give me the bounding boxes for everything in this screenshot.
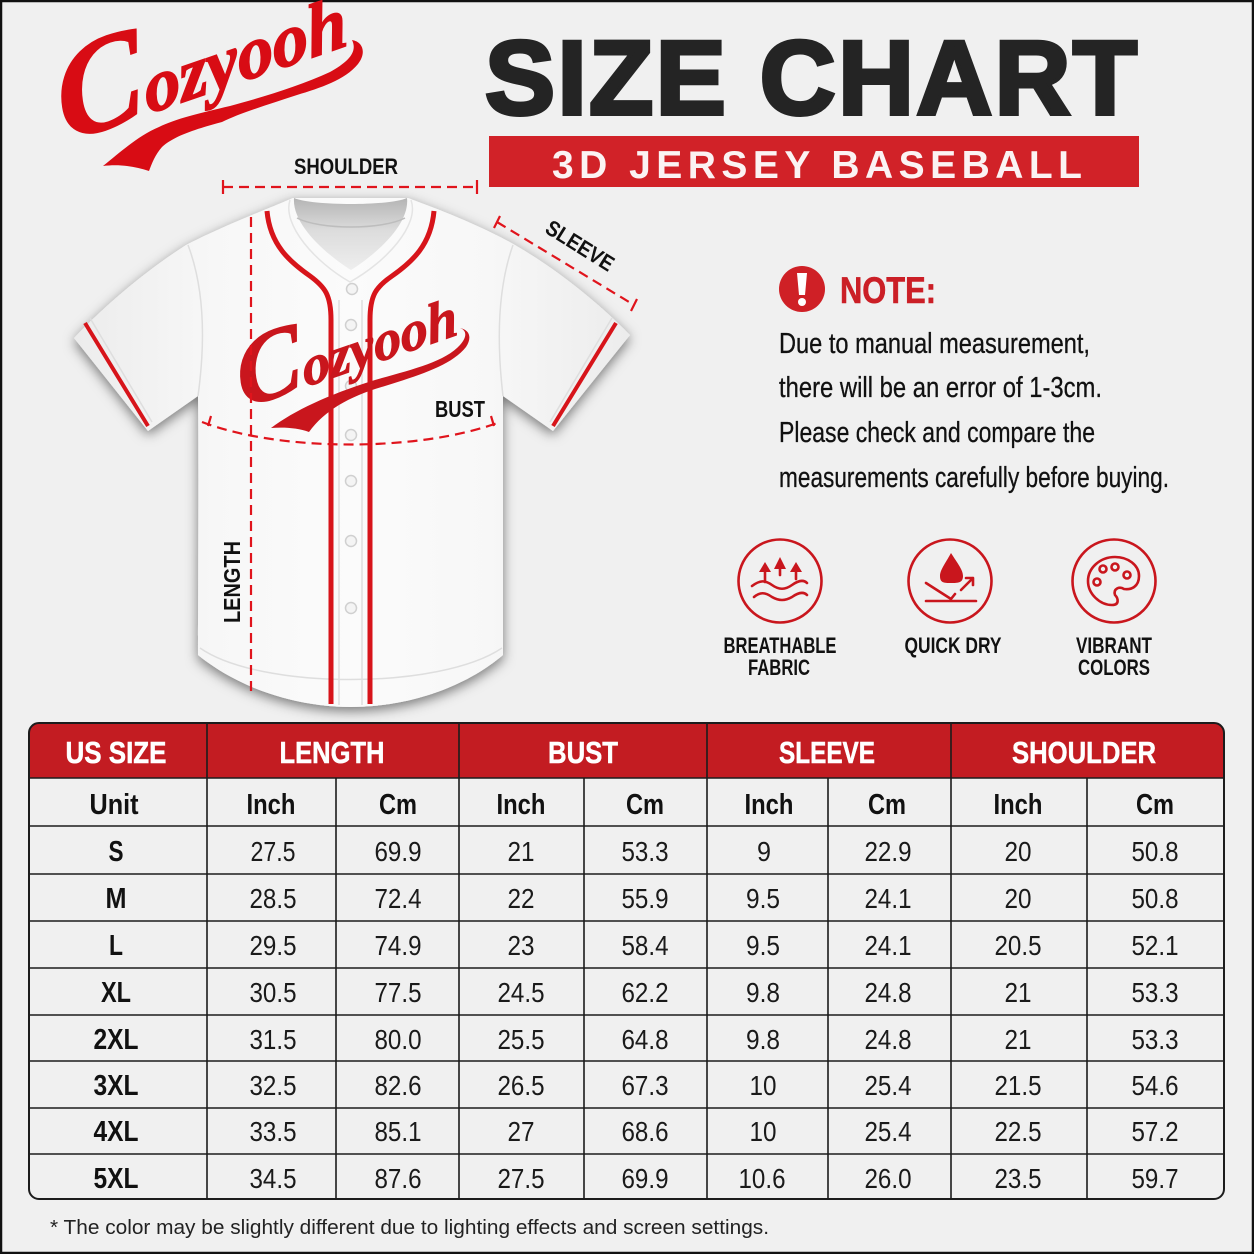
- sleeve cuffs: [85, 323, 616, 426]
- row L: L: [109, 930, 123, 962]
- unit row: [90, 789, 1174, 821]
- row S: S: [108, 836, 124, 868]
- row 3XL: 3XL: [94, 1070, 138, 1102]
- note heading: NOTE:: [840, 270, 936, 311]
- row S: 53.3: [622, 836, 668, 867]
- row 2XL: 64.8: [622, 1024, 668, 1055]
- footnote: * The color may be slightly different due to lighting effects and screen settings.: [50, 1217, 769, 1239]
- row 2XL: 53.3: [1132, 1024, 1178, 1055]
- measure: bust: [202, 396, 500, 444]
- row 5XL: 10.6: [738, 1163, 786, 1194]
- row S: 9: [757, 836, 771, 867]
- row 2XL: 31.5: [250, 1024, 296, 1055]
- subtitle banner: 3D JERSEY BASEBALL: [552, 144, 1082, 187]
- row S: 50.8: [1132, 836, 1178, 867]
- icon: quick dry: [904, 540, 1002, 658]
- row L: 58.4: [622, 930, 668, 961]
- row L: 20.5: [994, 930, 1042, 961]
- row L: [109, 930, 1178, 962]
- row L: 23: [508, 930, 534, 961]
- row M: 22: [508, 883, 534, 914]
- size table: [29, 723, 1224, 1199]
- row XL: [101, 977, 1178, 1009]
- unit row: Unit: [90, 789, 139, 821]
- row M: 9.5: [746, 883, 780, 914]
- row 3XL: 25.4: [864, 1070, 912, 1101]
- row 2XL: 80.0: [374, 1024, 422, 1055]
- row XL: XL: [101, 977, 131, 1009]
- unit row: Inch: [744, 789, 794, 821]
- row 5XL: 27.5: [498, 1163, 544, 1194]
- collar edge: [289, 200, 412, 282]
- row S: [108, 836, 1178, 868]
- row 4XL: 33.5: [250, 1116, 296, 1147]
- note text: there will be an error of 1-3cm.: [779, 372, 1102, 404]
- row 2XL: 2XL: [94, 1024, 138, 1056]
- row M: 50.8: [1132, 883, 1178, 914]
- row XL: 53.3: [1132, 977, 1178, 1008]
- row L: 52.1: [1132, 930, 1178, 961]
- row L: 74.9: [374, 930, 422, 961]
- row 2XL: [94, 1024, 1178, 1056]
- unit row: Cm: [626, 789, 664, 821]
- row 3XL: 54.6: [1132, 1070, 1178, 1101]
- table header: [66, 735, 1156, 770]
- table header: LENGTH: [280, 735, 384, 770]
- row 4XL: 22.5: [994, 1116, 1042, 1147]
- table grid: [29, 723, 1224, 1199]
- note text: [779, 328, 1169, 494]
- row S: 21: [508, 836, 534, 867]
- unit row: Cm: [379, 789, 417, 821]
- row 2XL: 24.8: [864, 1024, 912, 1055]
- measure: sleeve: [494, 215, 637, 311]
- row M: 28.5: [250, 883, 296, 914]
- icon: exclamation: [779, 266, 825, 312]
- row M: 24.1: [864, 883, 912, 914]
- row XL: 24.8: [864, 977, 912, 1008]
- row L: 29.5: [250, 930, 296, 961]
- jersey body: [74, 198, 630, 707]
- buttons: [346, 284, 358, 614]
- unit row: Inch: [496, 789, 546, 821]
- row S: 22.9: [864, 836, 912, 867]
- row 3XL: 82.6: [374, 1070, 422, 1101]
- label: [1076, 633, 1152, 680]
- row 5XL: 23.5: [994, 1163, 1042, 1194]
- row XL: 9.8: [746, 977, 780, 1008]
- unit row: Inch: [994, 789, 1042, 821]
- row 5XL: 5XL: [94, 1163, 138, 1195]
- unit row: Cm: [1136, 789, 1174, 821]
- measure: sleeve: SLEEVE: [541, 215, 619, 276]
- red piping: [267, 211, 434, 704]
- row 5XL: 87.6: [374, 1163, 422, 1194]
- row 3XL: 26.5: [498, 1070, 544, 1101]
- row 2XL: 9.8: [746, 1024, 780, 1055]
- row S: 20: [1004, 836, 1032, 867]
- row 4XL: 10: [750, 1116, 776, 1147]
- row 3XL: 21.5: [994, 1070, 1042, 1101]
- row 4XL: 68.6: [622, 1116, 668, 1147]
- row 4XL: 27: [508, 1116, 534, 1147]
- note text: Please check and compare the: [779, 417, 1095, 449]
- measure: shoulder: SHOULDER: [294, 154, 398, 179]
- row 5XL: 69.9: [622, 1163, 668, 1194]
- row 5XL: [94, 1163, 1178, 1195]
- seams: [90, 245, 612, 705]
- row 4XL: 25.4: [864, 1116, 912, 1147]
- table header: US SIZE: [66, 735, 166, 770]
- row 5XL: 59.7: [1132, 1163, 1178, 1194]
- row M: [106, 883, 1178, 915]
- measure: bust: BUST: [435, 396, 485, 422]
- row 4XL: [94, 1116, 1178, 1148]
- row S: 69.9: [374, 836, 422, 867]
- row 2XL: 25.5: [498, 1024, 544, 1055]
- unit row: Inch: [246, 789, 296, 821]
- label: [724, 633, 836, 680]
- row XL: 24.5: [498, 977, 544, 1008]
- row M: 72.4: [374, 883, 422, 914]
- row M: 20: [1004, 883, 1032, 914]
- row M: 55.9: [622, 883, 668, 914]
- measure: shoulder: [223, 154, 477, 194]
- jersey illustration: [74, 198, 630, 707]
- table header: BUST: [548, 735, 618, 770]
- label: FABRIC: [748, 655, 810, 680]
- row 3XL: 10: [750, 1070, 776, 1101]
- row XL: 21: [1004, 977, 1032, 1008]
- row S: 27.5: [250, 836, 296, 867]
- row 2XL: 21: [1004, 1024, 1032, 1055]
- row XL: 62.2: [622, 977, 668, 1008]
- jersey logo: Cozyooh: [228, 248, 463, 431]
- row L: 24.1: [864, 930, 912, 961]
- table header: SHOULDER: [1012, 735, 1156, 770]
- row XL: 30.5: [250, 977, 296, 1008]
- row 3XL: 67.3: [622, 1070, 668, 1101]
- subtitle banner: [489, 136, 1139, 187]
- row 5XL: 34.5: [250, 1163, 296, 1194]
- table header background: [29, 723, 1224, 778]
- row XL: 77.5: [374, 977, 422, 1008]
- measure: length: LENGTH: [219, 541, 245, 623]
- row 3XL: 32.5: [250, 1070, 296, 1101]
- note text: Due to manual measurement,: [779, 328, 1090, 360]
- neck opening: [294, 198, 407, 270]
- row 4XL: 85.1: [374, 1116, 422, 1147]
- label: VIBRANT: [1076, 633, 1152, 658]
- row 4XL: 4XL: [94, 1116, 138, 1148]
- row 5XL: 26.0: [864, 1163, 912, 1194]
- label: QUICK DRY: [904, 633, 1002, 658]
- icon: breathable fabric: [724, 540, 836, 680]
- title: SIZE CHART: [485, 20, 1137, 137]
- unit row: Cm: [868, 789, 906, 821]
- row 3XL: [94, 1070, 1178, 1102]
- row 4XL: 57.2: [1132, 1116, 1178, 1147]
- note: [779, 266, 1169, 494]
- icon: vibrant colors: [1072, 540, 1156, 680]
- row L: 9.5: [746, 930, 780, 961]
- label: COLORS: [1078, 655, 1150, 680]
- label: BREATHABLE: [724, 633, 836, 658]
- table header: SLEEVE: [779, 735, 875, 770]
- row M: M: [106, 883, 126, 915]
